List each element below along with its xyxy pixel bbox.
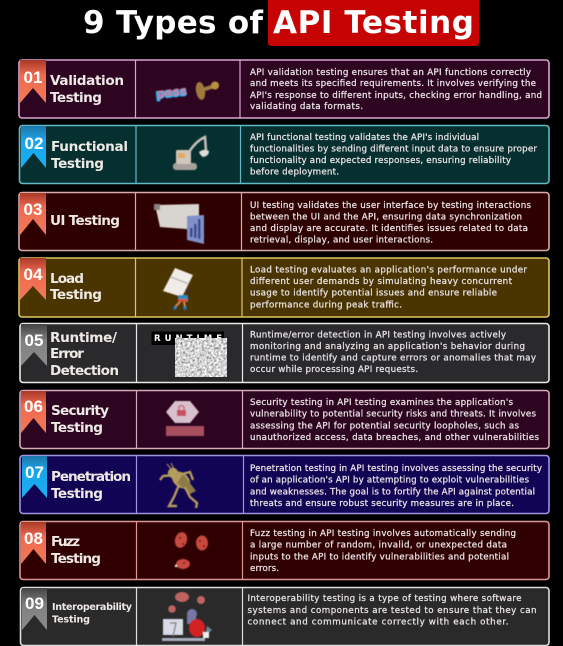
heading: Penetration xyxy=(51,469,131,485)
description: unauthorized access, data breaches, and other vulnerabilities xyxy=(250,433,539,443)
description: systems and components are tested to ensure that they can xyxy=(248,606,536,616)
icon: person at computer xyxy=(162,592,212,641)
description xyxy=(250,398,539,443)
description: functionalities by sending different input data to ensure proper xyxy=(250,144,537,154)
panel: 04 load testing xyxy=(19,258,549,317)
badge 07 xyxy=(22,456,47,498)
icon: interface window and chart xyxy=(154,204,204,244)
badge 01 xyxy=(20,60,46,103)
description: monitoring and analyzing an application's behavior during xyxy=(250,342,525,352)
description: runtime to identify and capture errors or anomalies that may xyxy=(250,354,536,364)
description xyxy=(248,594,536,628)
icon: person carrying fridge xyxy=(163,268,193,310)
description: before deployment. xyxy=(250,168,339,178)
heading: Testing xyxy=(50,287,102,303)
description: UI testing validates the user interface by testing interactions xyxy=(250,201,531,211)
heading: Testing xyxy=(51,486,103,502)
heading: Testing xyxy=(51,420,103,436)
description: inputs to the API to identify vulnerabilities and potential xyxy=(250,552,509,562)
panel: 06 security testing xyxy=(20,390,549,449)
panel: 09 interoperability testing xyxy=(20,587,549,646)
heading: Runtime/ xyxy=(50,330,117,346)
badge 03: 03 xyxy=(24,200,42,219)
description: API validation testing ensures that an API functions correctly xyxy=(250,68,531,78)
badge 09 xyxy=(22,588,47,630)
description: Fuzz testing in API testing involves automatically sending xyxy=(250,529,516,539)
heading: UI Testing xyxy=(50,213,120,229)
description: and weaknesses. The goal is to fortify the API against potential xyxy=(250,488,535,498)
description: occur while processing API requests. xyxy=(250,365,418,375)
panel: 08 fuzz testing xyxy=(20,521,549,580)
heading: Testing xyxy=(51,551,101,567)
icon: runtime noise screen: RUNTIME xyxy=(154,334,222,344)
description: assessing the API for potential security loopholes, such as xyxy=(250,422,519,432)
heading: Validation xyxy=(50,73,124,89)
description xyxy=(250,529,516,574)
heading xyxy=(51,139,128,172)
description: API's response to different inputs, checking error handling, and xyxy=(250,91,542,101)
panel: 07 penetration testing xyxy=(20,455,549,514)
icon: pass stamp: pass xyxy=(156,83,188,100)
heading: Interoperability xyxy=(52,602,133,613)
description: vulnerability to potential security risks and threats. It involves xyxy=(250,410,536,420)
description xyxy=(250,266,527,310)
description: functionality and expected responses, ensuring reliability xyxy=(250,156,511,166)
badge 07: 07 xyxy=(25,463,44,482)
heading: Testing xyxy=(52,614,90,626)
description xyxy=(250,133,537,178)
description: and display are accurate. It identifies issues related to data xyxy=(250,224,528,234)
description: Security testing in API testing examines the application's xyxy=(250,398,513,408)
badge 06 xyxy=(21,391,46,433)
description: Interoperability testing is a type of testing where software xyxy=(248,594,522,604)
heading xyxy=(50,73,124,106)
panel: 03 UI testing xyxy=(19,192,549,251)
description: retrieval, display, and user interactions. xyxy=(250,236,433,246)
description: Runtime/error detection in API testing involves actively xyxy=(250,330,506,340)
description xyxy=(250,464,542,509)
description: Load testing evaluates an application's performance under xyxy=(250,266,527,276)
description xyxy=(250,68,542,112)
title highlight: API Testing: API Testing xyxy=(273,5,474,41)
badge 03 xyxy=(20,193,46,235)
badge 05 xyxy=(21,324,47,366)
badge 08: 08 xyxy=(24,529,43,548)
icon: ladybugs xyxy=(173,531,208,569)
description xyxy=(250,330,536,375)
icon: runtime noise screen xyxy=(152,332,227,377)
heading xyxy=(52,602,133,626)
badge 09: 09 xyxy=(25,594,44,613)
description: errors. xyxy=(250,564,279,574)
description: of an application's API by attempting to exploit vulnerabilities xyxy=(250,476,529,486)
icon: pass stamp xyxy=(155,81,219,101)
description: between the UI and the API, ensuring data synchronization xyxy=(250,212,522,222)
description: a large number of random, invalid, or unexpected data xyxy=(250,540,507,550)
description: performance during peak traffic. xyxy=(250,300,402,310)
heading xyxy=(51,403,109,436)
heading: Security xyxy=(51,403,109,419)
icon: pass stamp: pass xyxy=(155,84,187,101)
icon: walking bug xyxy=(160,463,197,508)
heading xyxy=(51,534,101,567)
heading xyxy=(50,330,119,379)
description: API functional testing validates the API's individual xyxy=(250,133,479,143)
panel: 02 functional testing xyxy=(20,125,549,184)
heading xyxy=(51,469,131,502)
heading: Error xyxy=(50,346,84,362)
heading xyxy=(50,271,102,303)
title text: 9 Types of: 9 Types of xyxy=(83,5,264,41)
heading: Functional xyxy=(51,139,128,155)
badge 02: 02 xyxy=(25,134,43,153)
icon: security hexagon and lock xyxy=(166,401,204,436)
description: and meets its specified requirements. It involves verifying the xyxy=(250,79,536,89)
badge 08 xyxy=(21,522,46,564)
badge 02 xyxy=(21,126,46,168)
panel: 01 validation testing xyxy=(19,60,549,118)
badge 04 xyxy=(20,258,46,300)
badge 06: 06 xyxy=(24,397,43,416)
description: validating data formats. xyxy=(250,102,363,112)
heading: Testing xyxy=(51,156,104,172)
panel: 05 runtime error detection xyxy=(20,323,549,383)
heading: Testing xyxy=(50,90,102,106)
description xyxy=(250,201,531,246)
heading: Detection xyxy=(50,363,119,379)
icon: excavator xyxy=(173,137,209,170)
description: Penetration testing in API testing involves assessing the security xyxy=(250,464,542,474)
badge 04: 04 xyxy=(24,265,43,284)
description: connect and communicate correctly with each other. xyxy=(248,618,509,628)
description: threats and ensure robust security measures are in place. xyxy=(250,499,514,509)
description: different user demands by simulating heavy concurrent xyxy=(250,277,513,287)
title xyxy=(83,0,479,46)
badge 01: 01 xyxy=(24,68,42,87)
description: usage to identify potential issues and ensure reliable xyxy=(250,288,497,298)
heading: Load xyxy=(50,271,84,287)
heading: Fuzz xyxy=(51,534,80,550)
badge 05: 05 xyxy=(25,331,43,350)
